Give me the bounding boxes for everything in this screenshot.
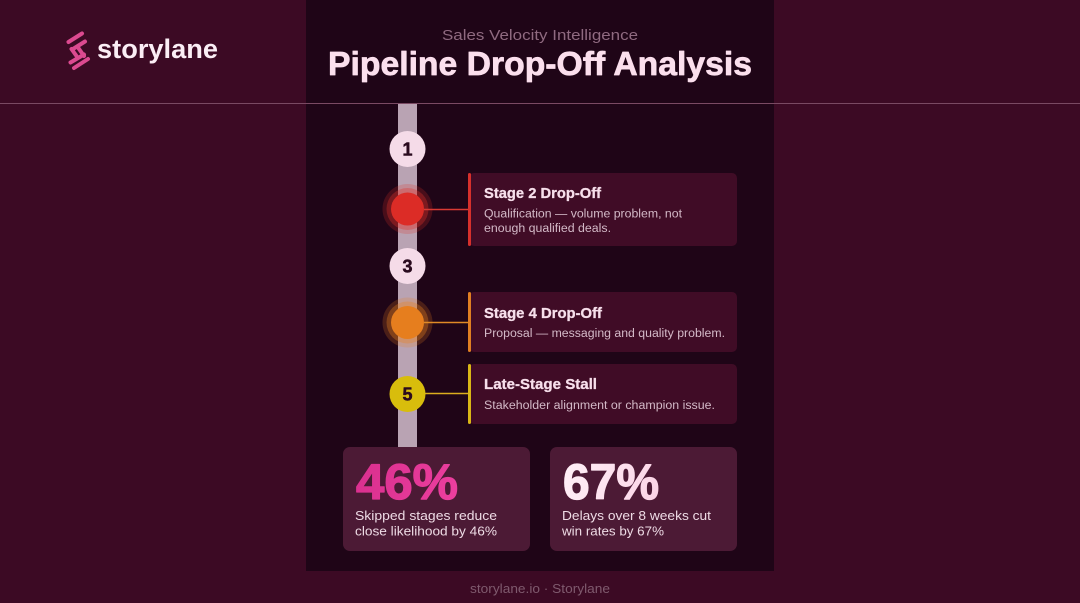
stage 5 node: yellow stall: 5 <box>402 384 413 404</box>
stage 3 node: 3 <box>402 256 413 276</box>
stage 5 node: yellow stall <box>390 376 426 412</box>
stage 4 node: orange drop-off <box>382 298 432 348</box>
callout: stage 2 drop-off: Qualification — volume problem, not <box>484 208 683 220</box>
stat card: 67%: 67% <box>563 454 659 510</box>
callout: stage 4 drop-off: Proposal — messaging and quality problem. <box>484 328 725 340</box>
stage 1 node: 1 <box>402 140 413 160</box>
stat card: 46%: close likelihood by 46% <box>355 524 497 538</box>
callout: late-stage stall: Late-Stage Stall <box>484 377 597 393</box>
stat card: 67%: Delays over 8 weeks cut <box>562 508 711 523</box>
connector: stage 4 <box>424 322 469 324</box>
logo wordmark: storylane <box>97 34 218 64</box>
footer: storylane.io · Storylane <box>470 582 610 596</box>
connector: stage 5 <box>425 392 469 394</box>
stat card: 67% <box>550 447 737 551</box>
stage 1 node <box>390 131 426 167</box>
stat card: 46%: 46% <box>356 454 458 510</box>
connector: stage 2 <box>424 208 469 210</box>
subtitle: Sales Velocity Intelligence <box>442 27 638 44</box>
callout: late-stage stall <box>468 364 737 424</box>
logo: storylane <box>68 34 218 68</box>
callout: late-stage stall: Stakeholder alignment or champion issue. <box>484 400 715 412</box>
callout: stage 2 drop-off: Stage 2 Drop-Off <box>484 186 601 202</box>
callout: stage 4 drop-off: Stage 4 Drop-Off <box>484 306 602 322</box>
stage 2 node: red drop-off <box>382 184 432 234</box>
pipeline timeline rail <box>398 104 417 447</box>
stat card: 67%: win rates by 67% <box>561 524 664 538</box>
heading block <box>328 27 752 82</box>
title: Pipeline Drop-Off Analysis <box>328 45 752 82</box>
stat card: 46% <box>343 447 530 551</box>
callout: stage 2 drop-off: enough qualified deals. <box>484 223 611 235</box>
stat card: 46%: Skipped stages reduce <box>355 508 497 523</box>
stage 3 node <box>390 248 426 284</box>
panel: central dark column <box>306 0 774 571</box>
callout: stage 2 drop-off <box>468 173 737 246</box>
callout: stage 4 drop-off <box>468 292 737 352</box>
icon: storylane mark <box>68 34 88 68</box>
